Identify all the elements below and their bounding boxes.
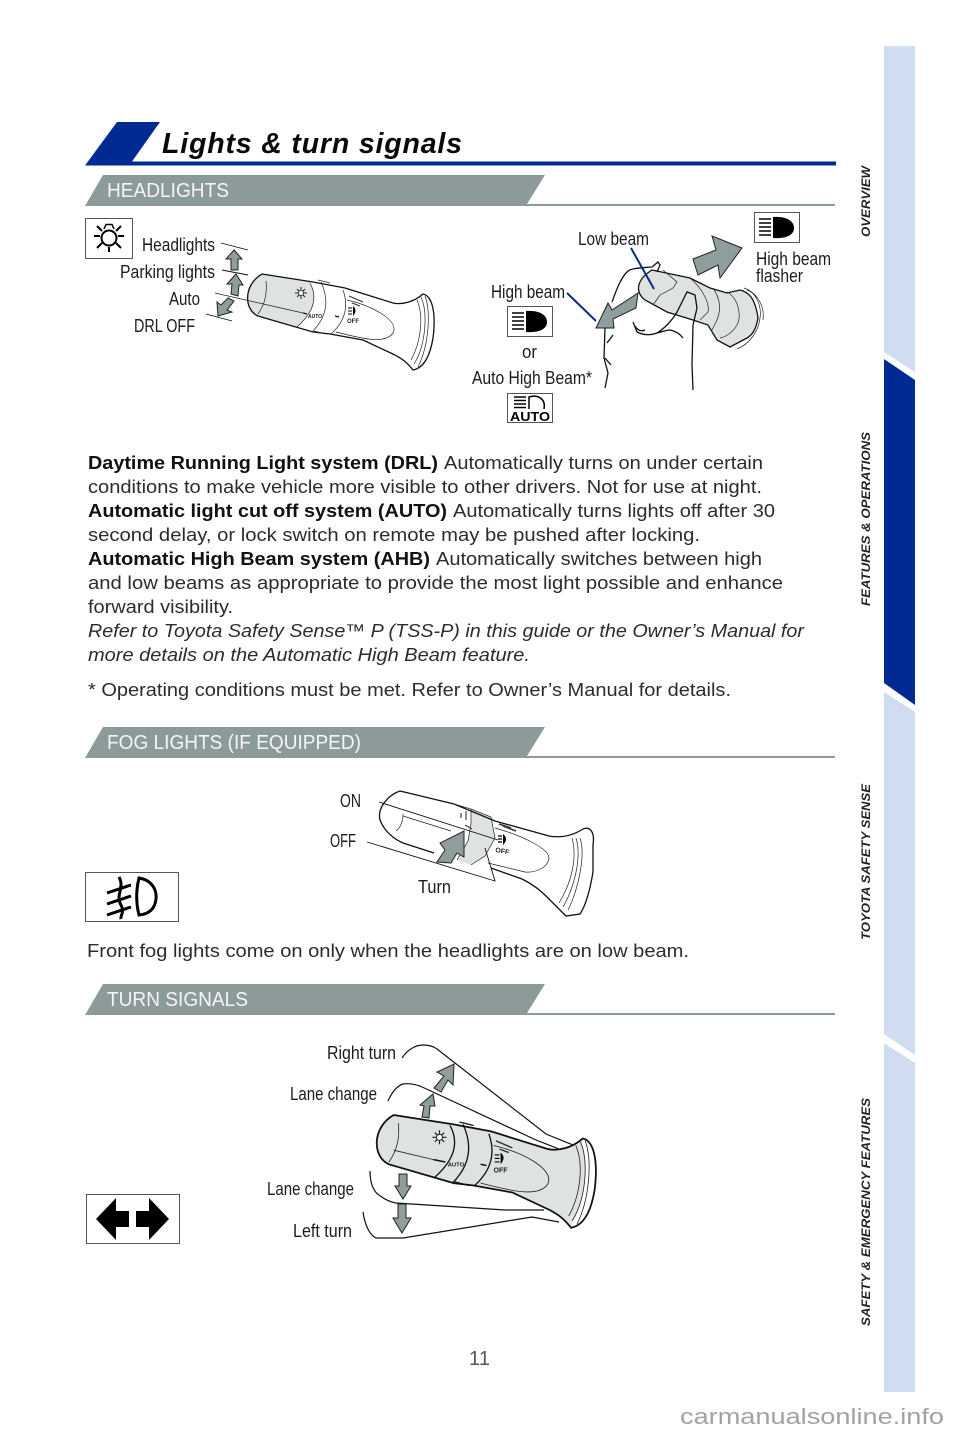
fog switch labels: ON [340, 791, 361, 811]
arrows: turn signal directions [393, 1064, 454, 1233]
illustration: fog light stalk: OFF [495, 847, 510, 857]
icon: fog light [86, 872, 178, 922]
turn signal labels: Lane change [267, 1179, 354, 1199]
arrows: headlight switch positions [217, 250, 243, 316]
nav tab: features and operations (active): FEATURES & OPERATIONS [859, 432, 873, 606]
section heading: fog lights [85, 727, 835, 758]
section heading: headlights [85, 175, 835, 206]
headlight switch labels [120, 235, 248, 336]
section heading: fog lights: FOG LIGHTS (IF EQUIPPED) [107, 732, 361, 754]
text block: headlight description [88, 452, 805, 665]
hand stalk labels: High beam [756, 249, 831, 269]
text block: headlight description: Refer to Toyota Safety Sense™ P (TSS-P) in this guide or the Owner’s Manual for [88, 620, 805, 641]
hand stalk labels: Low beam [578, 229, 649, 249]
nav tab: overview [859, 46, 915, 372]
text block: headlight description: Automatically turns lights off after 30 [453, 500, 775, 521]
fog light description: Front fog lights come on only when the headlights are on low beam. [87, 940, 689, 961]
fog switch labels: OFF [330, 831, 356, 851]
text block: headlight description: conditions to make vehicle more visible to other drivers. Not for use at night. [88, 476, 762, 497]
section heading: turn signals: TURN SIGNALS [107, 989, 248, 1011]
illustration: hand operating stalk [604, 262, 763, 390]
turn signal labels [267, 1043, 396, 1241]
nav tab: overview: OVERVIEW [859, 164, 873, 237]
hand stalk labels: Auto High Beam* [472, 368, 592, 388]
turn signal labels: Right turn [327, 1043, 396, 1063]
fog switch labels [330, 791, 451, 897]
switch markings: OFF [347, 319, 359, 325]
headlight switch labels: Auto [169, 289, 200, 309]
icon: turn signals [86, 1194, 180, 1244]
page number: 11 [469, 1348, 490, 1370]
nav tab: safety and emergency features: SAFETY & EMERGENCY FEATURES [859, 1098, 873, 1326]
text block: headlight description: Automatically switches between high [436, 548, 762, 569]
text block: headlight description: Automatic light cut off system (AUTO) [88, 500, 447, 521]
nav tab: features and operations (active) [859, 359, 915, 705]
leader lines: beams [567, 248, 654, 321]
switch markings [295, 287, 363, 325]
footnote: * Operating conditions must be met. Refer to Owner’s Manual for details. [88, 679, 731, 700]
title: Lights & turn signals [162, 128, 462, 160]
illustration: turn signal stalk: AUTO [448, 1163, 465, 1169]
text block: headlight description: Daytime Running Light system (DRL) [88, 452, 438, 473]
text block: headlight description: second delay, or lock switch on remote may be pushed after locking. [88, 524, 700, 545]
hand stalk labels: or [522, 342, 537, 362]
headlight switch labels: DRL OFF [134, 316, 195, 336]
hand stalk labels [472, 229, 831, 388]
title bar [85, 122, 836, 166]
fog switch labels: Turn [418, 877, 451, 897]
side navigation tabs [859, 46, 915, 1392]
hand stalk labels: flasher [756, 266, 803, 286]
hand stalk labels: High beam [491, 282, 565, 302]
switch markings: AUTO [308, 314, 322, 320]
nav tab: toyota safety sense [859, 692, 915, 1055]
illustration: fog light stalk [367, 791, 593, 916]
text block: headlight description: more details on the Automatic High Beam feature. [88, 644, 530, 665]
icon: high beam flasher [754, 212, 800, 242]
illustration: turn signal stalk: OFF [494, 1168, 508, 1175]
headlight switch labels: Headlights [142, 235, 215, 255]
icon: headlight switch [86, 218, 132, 258]
headlight switch labels: Parking lights [120, 262, 215, 282]
text block: headlight description: and low beams as appropriate to provide the most light possible and enhance [88, 572, 783, 593]
icon: high beam [508, 306, 552, 336]
turn signal labels: Lane change [290, 1084, 377, 1104]
nav tab: toyota safety sense: TOYOTA SAFETY SENSE [859, 783, 873, 940]
illustration: headlight stalk [215, 274, 434, 370]
text block: headlight description: forward visibility. [88, 596, 233, 617]
turn signal labels: Left turn [293, 1221, 352, 1241]
arrow: turn [437, 831, 464, 863]
text block: headlight description: Automatically turns on under certain [444, 452, 763, 473]
illustration: turn signal stalk [377, 1115, 596, 1228]
turn signal travel lines [363, 1045, 573, 1238]
section heading: headlights: HEADLIGHTS [107, 180, 229, 202]
watermark: carmanualsonline.info [680, 1404, 944, 1429]
section heading: turn signals [85, 984, 835, 1015]
nav tab: safety and emergency features [859, 1043, 915, 1392]
icon: auto high beam: AUTO [510, 410, 550, 424]
arrow: high beam [596, 293, 638, 328]
arrow: high beam flasher [693, 236, 742, 278]
text block: headlight description: Automatic High Beam system (AHB) [88, 548, 430, 569]
icon: auto high beam [508, 394, 552, 424]
